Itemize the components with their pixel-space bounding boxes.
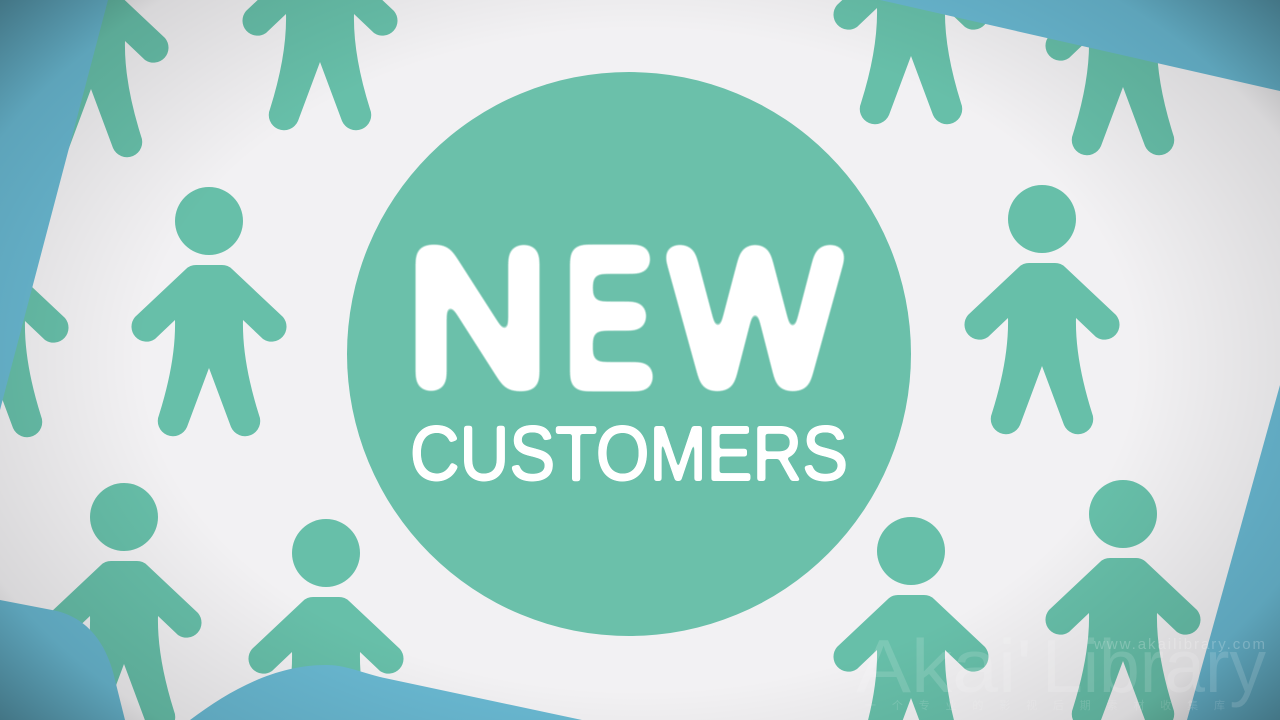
heading: NEW: N [407, 210, 548, 425]
watermark: logo: Library [1042, 624, 1266, 708]
blue frame: top left [0, 0, 108, 410]
heading: NEW: W [670, 210, 840, 425]
person icon: middle left [131, 187, 287, 436]
watermark: url: www.akailibrary.com [1093, 636, 1265, 653]
blue frame: right [1187, 385, 1280, 720]
person icon: top right [1045, 0, 1201, 155]
watermark: logo: Akai' [856, 624, 1032, 708]
person icon: bottom centre-right [833, 517, 989, 720]
watermark [856, 624, 1266, 712]
person icon: top left [13, 0, 169, 157]
person icon: top centre-right [833, 0, 989, 124]
person icon: bottom centre-left [248, 519, 404, 720]
blue frame: top right [880, 0, 1280, 91]
blue frame: bottom left [0, 600, 125, 720]
person icon: bottom left [46, 483, 202, 720]
person icon: top centre-left [242, 0, 398, 130]
person icon: bottom right [1045, 480, 1201, 720]
central circle badge [347, 72, 911, 636]
watermark: tagline: 一个专业的影视后期素材收集库 [865, 698, 1225, 712]
blue frame: bottom centre [190, 665, 582, 720]
person icon: middle far left [0, 188, 69, 437]
person icon: middle right [964, 185, 1120, 434]
heading: NEW: E [564, 210, 654, 425]
subheading: CUSTOMERS: CUSTOMERS [410, 411, 848, 497]
heading: NEW [407, 210, 840, 425]
